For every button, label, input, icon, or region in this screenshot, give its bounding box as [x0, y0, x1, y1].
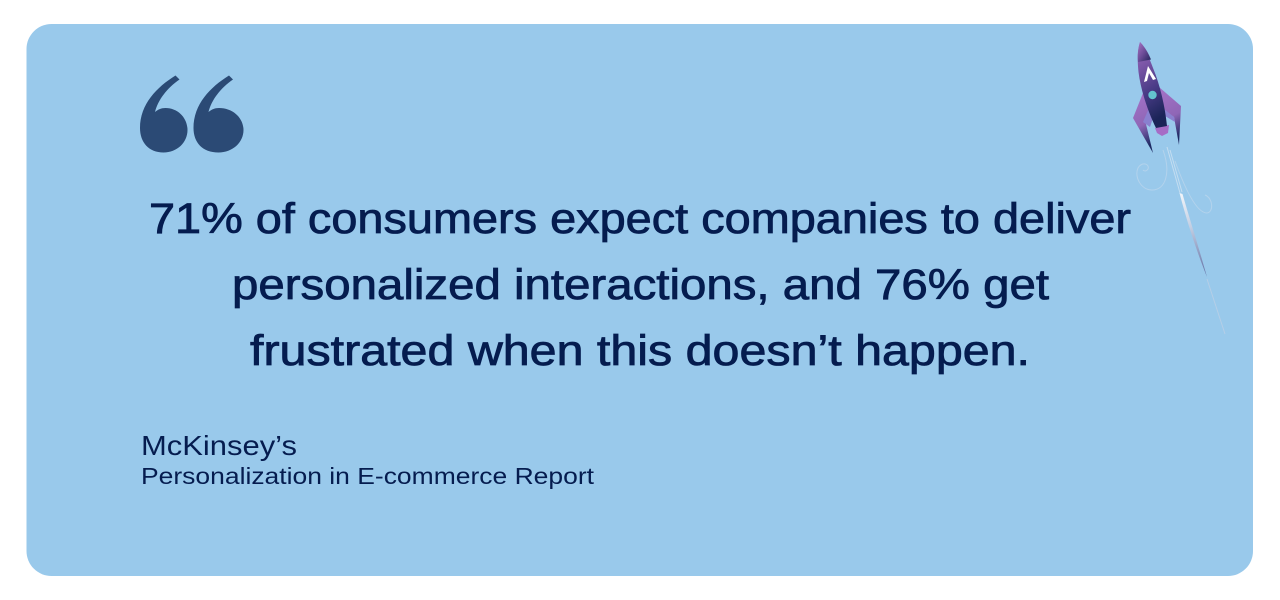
icon: rocket with trail — [1133, 42, 1225, 334]
attribution — [141, 430, 595, 489]
quote text: frustrated when this doesn’t happen. — [250, 328, 1030, 375]
rocket body — [1138, 42, 1167, 128]
attribution: Personalization in E-commerce Report — [141, 463, 595, 489]
icon: quotation marks — [140, 76, 244, 152]
quote text: personalized interactions, and 76% get — [232, 262, 1049, 309]
rocket logo — [1144, 66, 1156, 82]
rocket exhaust trail — [1137, 147, 1225, 334]
rocket window — [1148, 91, 1157, 99]
quote text — [149, 196, 1131, 375]
rocket nose — [1138, 42, 1151, 62]
attribution: McKinsey’s — [141, 430, 297, 461]
rocket nozzle — [1155, 125, 1169, 136]
rocket fins — [1133, 93, 1153, 153]
quote text: 71% of consumers expect companies to deliver — [149, 196, 1131, 243]
